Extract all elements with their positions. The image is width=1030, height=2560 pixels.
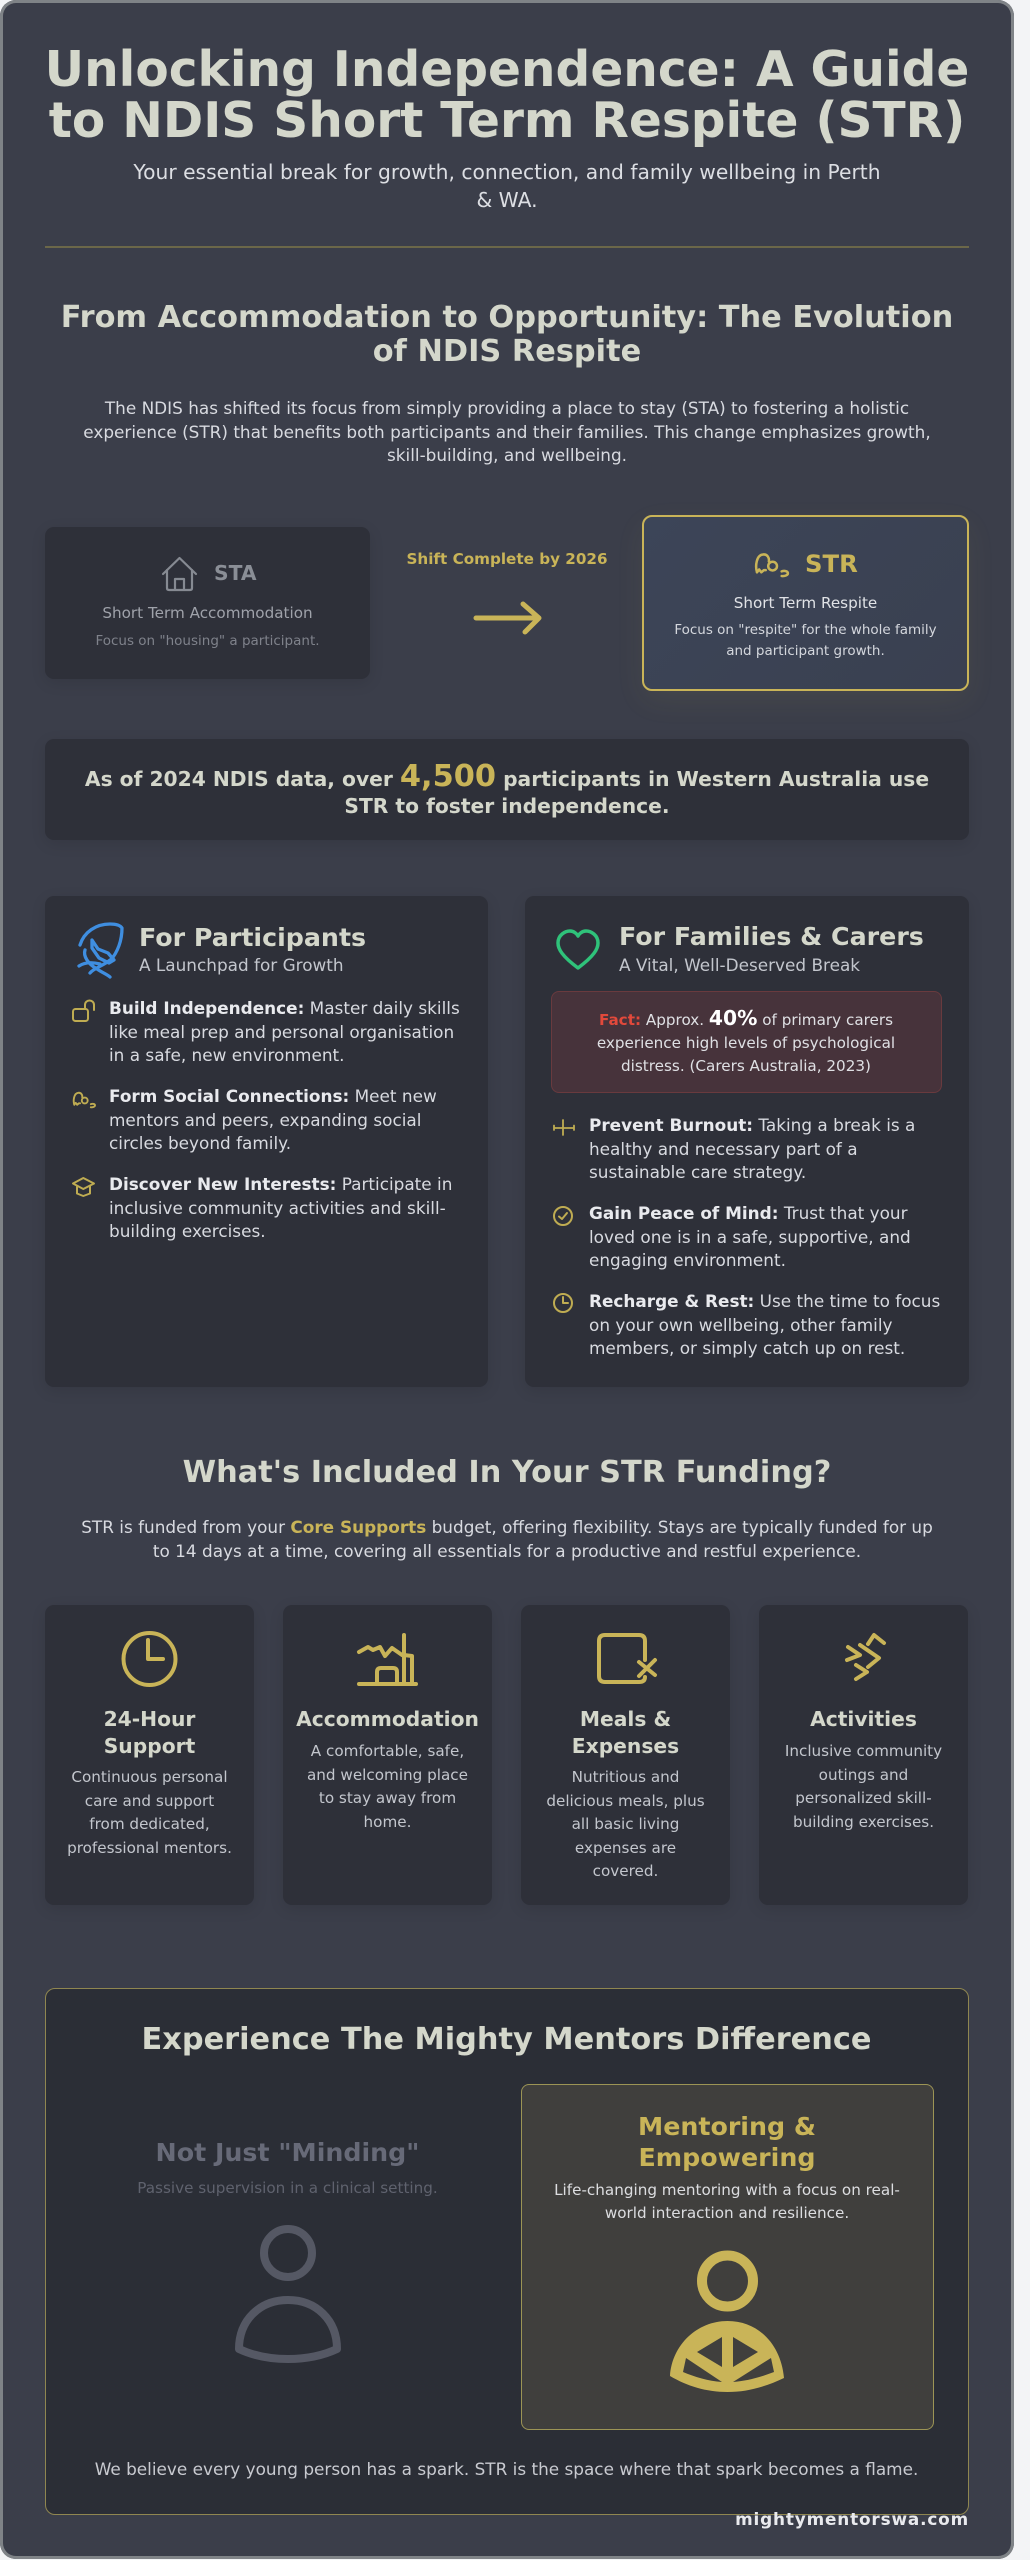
item text: Recharge & Rest: Use the time to focus [589,1291,940,1311]
item text: Discover New Interests: Participate in [109,1174,452,1194]
icon: house [162,556,197,592]
item text [109,998,460,1065]
column heading: Not Just "Minding" [156,2138,419,2167]
icon: person outline [223,2221,353,2371]
item: build independence [72,998,460,1065]
item text: sustainable care strategy. [589,1162,806,1182]
families subheading: A Vital, Well-Deserved Break [619,955,860,975]
item text [589,1115,915,1182]
title: to NDIS Short Term Respite (STR) [49,93,965,149]
icon: heart [556,929,600,970]
subtitle: & WA. [476,188,538,212]
card text [67,1768,232,1857]
STR name: Short Term Respite [734,594,877,612]
icon: house under roofline [356,1633,418,1686]
icon: meals [597,1633,658,1684]
subtitle: Your essential break for growth, connection, and family wellbeing in Perth [133,160,881,184]
fact text: experience high levels of psychological [597,1034,895,1052]
card text: building exercises. [793,1813,934,1831]
card text: and welcoming place [307,1766,468,1784]
card text: personalized skill- [795,1789,932,1807]
card heading: Support [104,1734,195,1758]
item text: healthy and necessary part of a [589,1139,858,1159]
panel: STA [45,527,370,679]
card heading: Meals & [580,1706,671,1730]
item text: Build Independence: Master daily skills [109,998,460,1018]
card heading [104,1706,196,1758]
item text [589,1203,911,1270]
intro paragraph: skill-building, and wellbeing. [387,445,627,465]
card text: covered. [593,1862,658,1880]
heading: evolution of respite [61,300,953,369]
closing statement: We believe every young person has a spark. STR is the space where that spark becomes a flame. [95,2459,918,2479]
column text: world interaction and resilience. [605,2204,849,2222]
card text: expenses are [575,1839,676,1857]
shift label: Shift Complete by 2026 [406,550,608,568]
item text [109,1174,452,1241]
card text: Continuous personal [71,1768,228,1786]
fact text: Fact: Approx. 40% of primary carers [599,1006,893,1030]
funding paragraph [81,1517,933,1561]
item text [109,1086,437,1153]
title [45,42,969,149]
icon: unlocked padlock [72,1000,95,1022]
icon: clock [553,1293,573,1313]
card: 24-hour support [45,1605,254,1905]
icon: activity chevrons [844,1632,886,1682]
item text: Prevent Burnout: Taking a break is a [589,1115,915,1135]
fact callout [551,991,942,1093]
icon: check badge [553,1206,573,1226]
footer website: mightymentorswa.com [735,2509,969,2529]
item text: Gain Peace of Mind: Trust that your [589,1203,908,1223]
card heading: 24-Hour [104,1706,195,1730]
card text: from dedicated, [89,1815,210,1833]
card heading: Accommodation [296,1706,479,1730]
STR label: STR [805,549,858,578]
card text [759,1740,968,1834]
card heading: Activities [810,1706,917,1730]
card text [307,1742,468,1831]
item: form social connections [72,1086,437,1153]
card text: outings and [819,1766,908,1784]
item text: loved one is in a safe, supportive, and [589,1227,911,1247]
panel heading: Experience The Mighty Mentors Difference [141,2022,872,2057]
item text: circles beyond family. [109,1133,291,1153]
title: Unlocking Independence: A Guide [45,42,969,98]
item text: engaging environment. [589,1250,786,1270]
column text: Life-changing mentoring with a focus on real- [554,2180,900,2198]
panel: for families and carers [525,896,969,1387]
card text: delicious meals, plus [546,1792,705,1810]
heading: evolution of respite: of NDIS Respite [373,334,641,369]
column heading [520,2111,934,2173]
card text: home. [364,1813,411,1831]
heading: funding: What's Included In Your STR Funding? [183,1455,831,1490]
panel: for participants [45,896,488,1387]
item text: like meal prep and personal organisation [109,1022,454,1042]
card: accommodation [283,1605,492,1905]
panel: mighty mentors difference [45,1988,969,2515]
item text: inclusive community activities and skill- [109,1198,446,1218]
STR description [674,622,937,659]
item: recharge and rest [553,1291,940,1358]
heading: evolution of respite: From Accommodation to Opportunity: The Evolution [61,300,953,335]
card text: A comfortable, safe, [311,1742,464,1760]
STR description: Focus on "respite" for the whole family [674,622,937,638]
card text: care and support [85,1792,214,1810]
panel: STR [642,515,969,691]
item text: members, or simply catch up on rest. [589,1338,905,1358]
icon: graduation cap [72,1177,95,1197]
item text: building exercises. [109,1221,266,1241]
card: meals and expenses [521,1605,730,1905]
column text: Passive supervision in a clinical setting. [137,2179,438,2197]
STA name: Short Term Accommodation [102,604,313,622]
column: not just minding [105,2119,470,2379]
STA label: STA [214,561,256,585]
funding paragraph: STR is funded from your Core Supports budget, offering flexibility. Stays are typically funded for up [81,1517,933,1537]
fact text: distress. (Carers Australia, 2023) [621,1057,871,1075]
column: mentoring and empowering [520,2084,934,2430]
participants heading: For Participants [139,923,366,952]
icon: person with spokes [650,2240,830,2400]
card text: to stay away from [319,1789,456,1807]
item: gain peace of mind [553,1203,911,1270]
card heading: Expenses [572,1734,679,1758]
item text: mentors and peers, expanding social [109,1110,421,1130]
card text: Nutritious and [572,1768,679,1786]
intro paragraph: experience (STR) that benefits both participants and their families. This change emphasizes growth, [83,422,931,442]
stat text: As of 2024 NDIS data, over 4,500 participants in Western Australia use [85,758,929,794]
intro paragraph [83,398,931,465]
stat text [85,758,929,818]
STA description: Focus on "housing" a participant. [95,633,320,649]
card heading [572,1706,679,1758]
column heading: Mentoring & [638,2112,816,2141]
icon: balance [553,1119,575,1136]
subtitle [133,160,881,212]
card text: Inclusive community [785,1742,942,1760]
card text: professional mentors. [67,1839,232,1857]
item: prevent burnout [553,1115,915,1182]
card text [546,1768,705,1880]
icon: people [754,553,790,578]
column text [520,2178,934,2226]
item text: in a safe, new environment. [109,1045,344,1065]
icon: rocket [77,922,124,979]
stat callout: 4,500 participants [45,739,969,840]
item text [589,1291,940,1358]
item: discover new interests [72,1174,452,1241]
intro paragraph: The NDIS has shifted its focus from simply providing a place to stay (STA) to fostering a holistic [105,398,909,418]
fact text [597,1006,895,1075]
participants subheading: A Launchpad for Growth [139,955,344,975]
funding paragraph: to 14 days at a time, covering all essentials for a productive and restful experience. [153,1541,861,1561]
icon: people [72,1092,96,1108]
item text: on your own wellbeing, other family [589,1315,892,1335]
STR description: and participant growth. [726,643,885,659]
item text: Form Social Connections: Meet new [109,1086,437,1106]
column heading: Empowering [639,2143,815,2172]
families heading: For Families & Carers [619,922,924,951]
card text: all basic living [572,1815,679,1833]
icon: clock [122,1631,178,1687]
arrow [474,602,542,634]
stat text: STR to foster independence. [344,794,670,818]
card: activities [759,1605,968,1905]
